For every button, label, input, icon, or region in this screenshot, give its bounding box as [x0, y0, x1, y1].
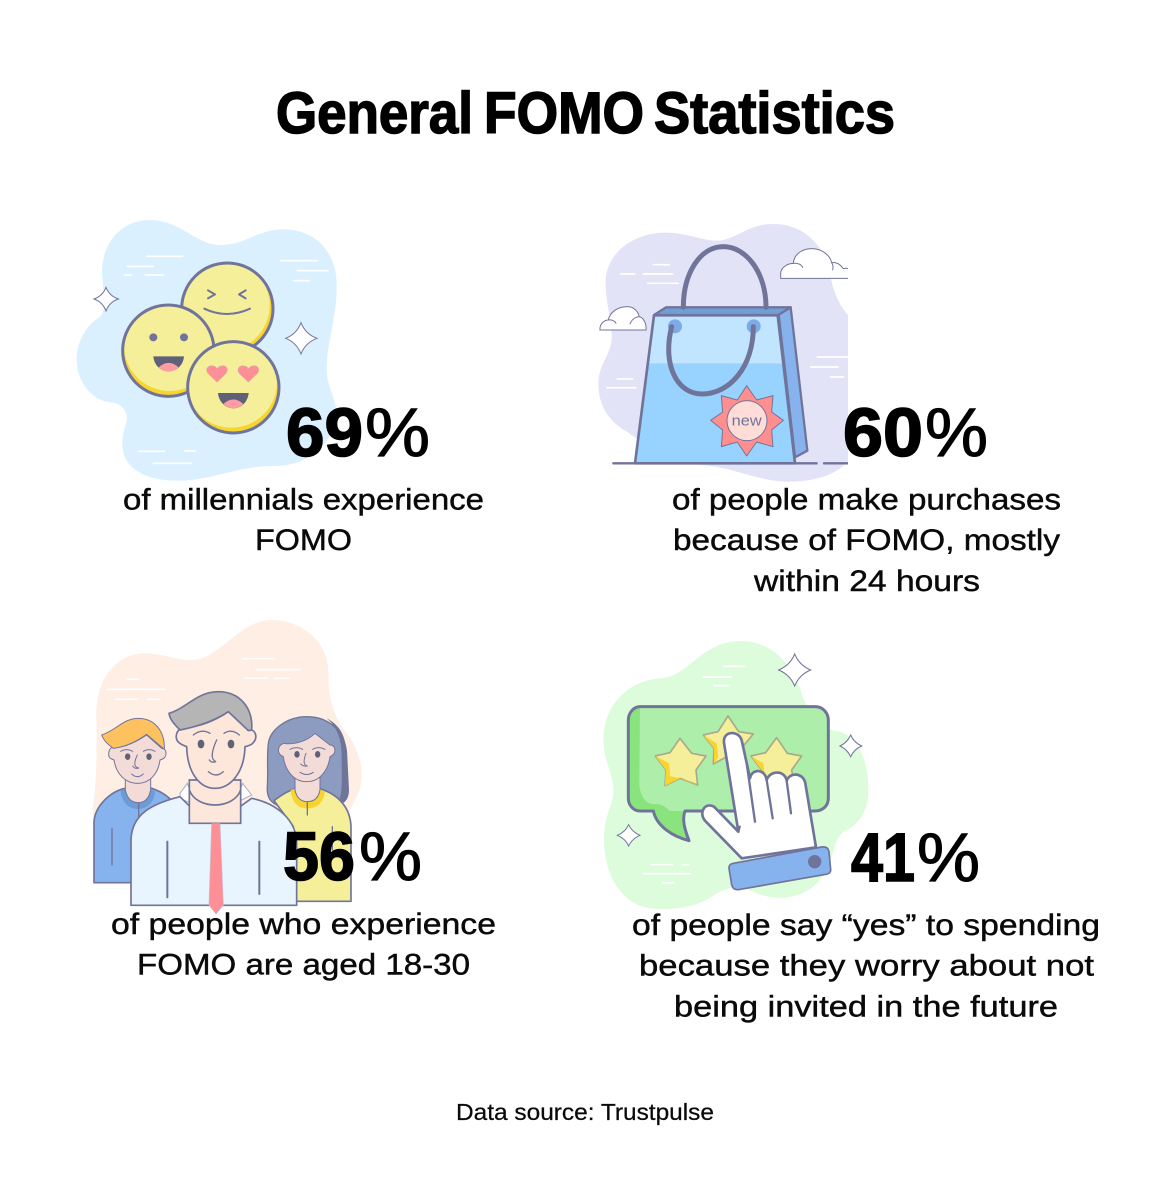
panel: spending	[603, 641, 1100, 1024]
text: purchases: of people make purchases	[672, 484, 1061, 516]
illustration: shopping bag	[598, 224, 857, 482]
text: spending: because they worry about not	[639, 950, 1095, 982]
text: age group	[111, 908, 496, 982]
panel: purchases	[598, 224, 1061, 598]
illustration: three people	[93, 620, 361, 914]
text: millennials: of millennials experience	[123, 484, 484, 516]
data source: Data source: Trustpulse	[456, 1099, 714, 1125]
text: purchases	[672, 484, 1061, 598]
text: millennials: FOMO	[255, 524, 352, 557]
text: purchases: because of FOMO, mostly	[673, 524, 1060, 557]
boy	[94, 788, 177, 883]
statistic: 56%	[283, 818, 422, 895]
text: spending: being invited in the future	[674, 990, 1058, 1024]
text: purchases: within 24 hours	[753, 565, 980, 598]
statistic: 69%: 69	[286, 394, 363, 471]
text: spending	[632, 909, 1100, 1024]
text: millennials	[123, 484, 484, 557]
illustration: emoji faces	[77, 220, 337, 481]
title	[276, 81, 895, 146]
text: age group: FOMO are aged 18-30	[137, 948, 470, 982]
statistic: 41%	[851, 819, 980, 896]
panel: age group	[93, 620, 496, 982]
statistic: 69%: %	[365, 394, 430, 471]
panel: millennials	[77, 220, 484, 557]
statistic: 60%: 60	[843, 394, 923, 471]
title: Statistics	[654, 81, 895, 146]
text: age group: of people who experience	[111, 908, 496, 941]
statistic: 60%	[843, 394, 988, 471]
illustration: shopping bag: new	[732, 413, 762, 429]
statistic: 69%	[286, 394, 430, 471]
man	[180, 783, 252, 805]
statistic: 56%: 56	[283, 818, 355, 895]
statistic: 41%: %	[917, 819, 980, 896]
statistic: 56%: %	[359, 818, 422, 895]
title: General	[276, 81, 473, 146]
statistic: 41%: 41	[851, 819, 915, 896]
statistic: 60%: %	[925, 394, 988, 471]
text: spending: of people say “yes” to spending	[632, 909, 1100, 942]
title: FOMO	[484, 81, 644, 146]
illustration: rating bubble and hand	[603, 641, 868, 909]
woman	[267, 717, 348, 805]
